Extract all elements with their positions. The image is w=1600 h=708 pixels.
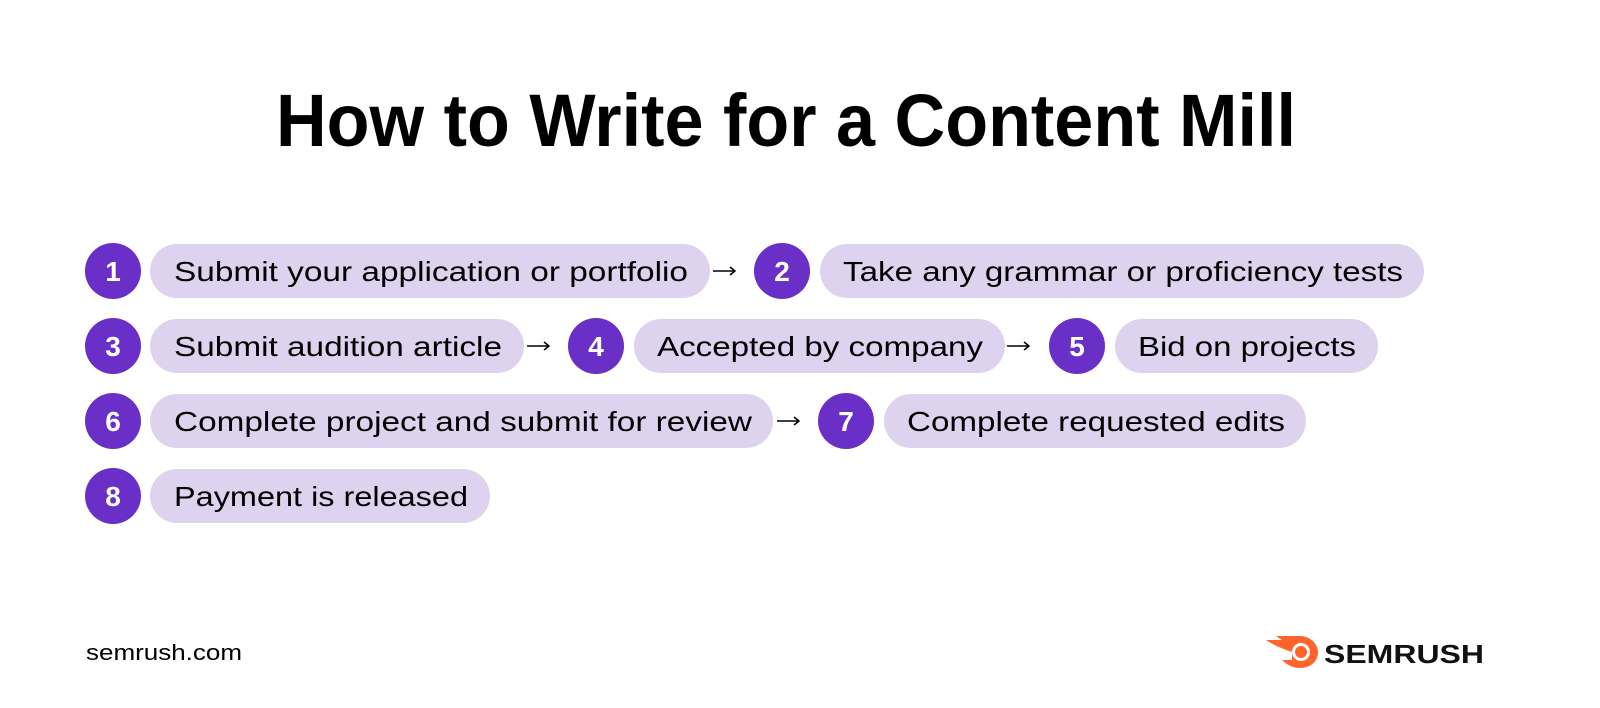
arrow [1007,342,1029,350]
logo: semrush: SEMRUSH [1324,639,1484,669]
arrow [777,417,799,425]
step 5: 5 [1069,331,1085,362]
step 2 [754,243,1424,299]
step 6: 6 [105,406,121,437]
step 7: Complete requested edits [907,406,1285,437]
logo: semrush [1266,636,1484,669]
row 3 [85,393,1306,449]
title: How to Write for a Content Mill [276,79,1296,162]
step 3: Submit audition article [174,331,502,362]
step 8: 8 [105,481,121,512]
step 6: Complete project and submit for review [174,406,753,437]
row 1 [85,243,1424,299]
step 7 [818,393,1306,449]
step 1: Submit your application or portfolio [174,256,688,287]
step 2: Take any grammar or proficiency tests [843,256,1403,287]
footer url: semrush.com [86,640,242,665]
icon: flame [1266,636,1318,668]
step 3: 3 [105,331,121,362]
row 4 [85,468,490,524]
step 1: 1 [105,256,121,287]
step 5 [1049,318,1378,374]
arrow [713,267,735,275]
step 3 [85,318,524,374]
step 7: 7 [838,406,854,437]
step 1 [85,243,710,299]
step 8: Payment is released [174,481,468,512]
step 4: Accepted by company [657,331,983,362]
arrow [527,342,549,350]
step 6 [85,393,773,449]
step 8 [85,468,490,524]
step 4 [568,318,1005,374]
row 2 [85,318,1378,374]
step 4: 4 [588,331,604,362]
step 2: 2 [774,256,790,287]
step 5: Bid on projects [1138,331,1356,362]
